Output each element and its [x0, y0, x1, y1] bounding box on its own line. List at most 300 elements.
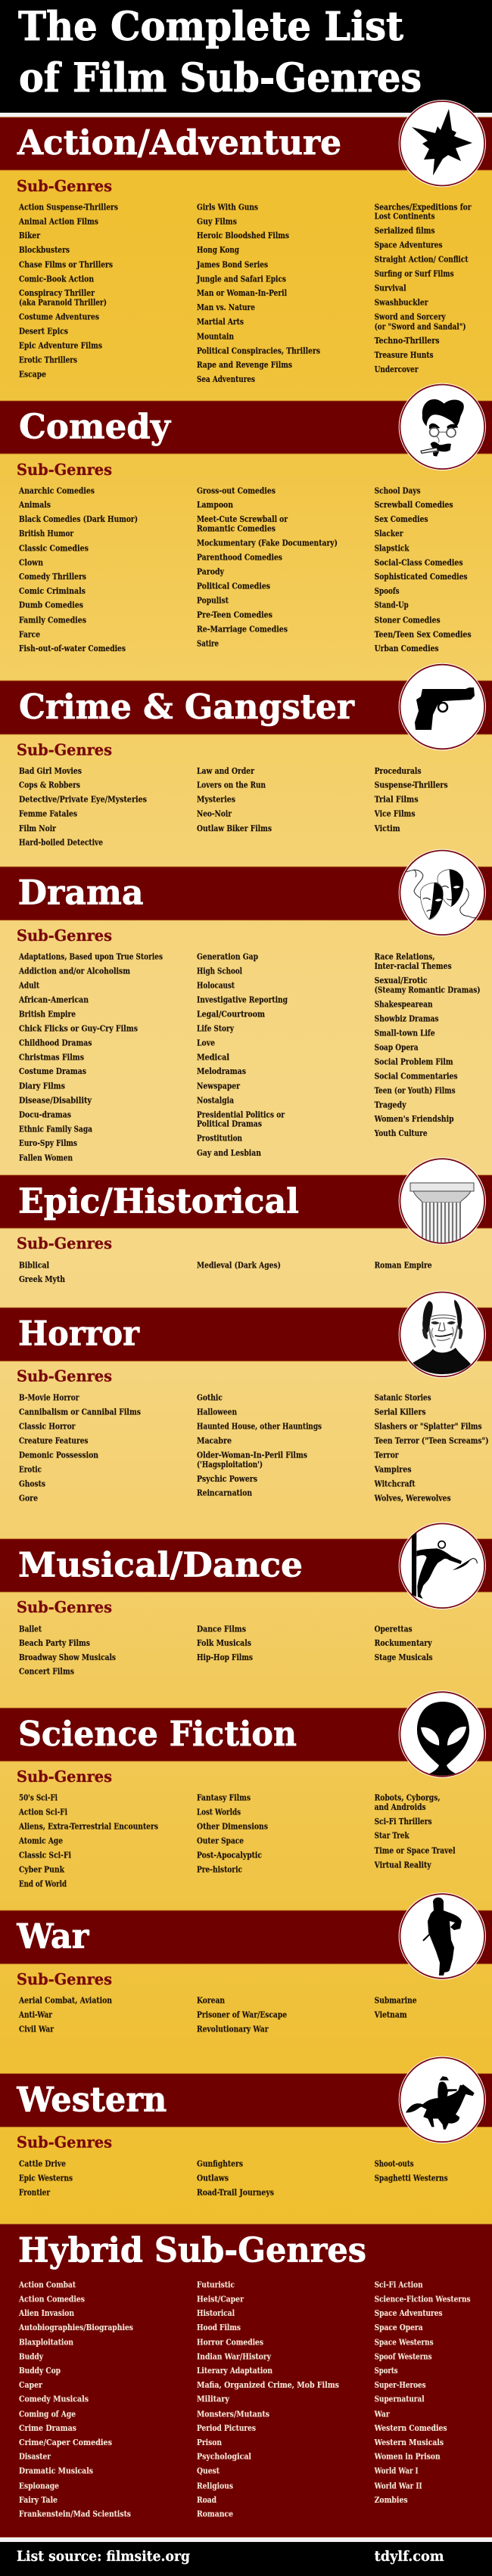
list column 3: Science-Fiction Westerns — [375, 2294, 471, 2304]
list column 1: B-Movie Horror — [19, 1393, 79, 1403]
list column 1: Espionage — [19, 2481, 59, 2491]
list column 1: Christmas Films — [19, 1052, 84, 1062]
list column 2: Post-Apocalyptic — [197, 1851, 262, 1861]
list column 3: Space Westerns — [375, 2337, 434, 2347]
list column 1: Action Sci-Fi — [18, 1808, 67, 1817]
list column 3: Race Relations, — [375, 952, 435, 962]
list column 3: Zombies — [375, 2495, 408, 2505]
list column 2: Legal/Courtroom — [197, 1010, 265, 1020]
list column 2: Nostalgia — [197, 1096, 234, 1106]
list column 2: Hong Kong — [197, 245, 239, 255]
list column 1: Dumb Comedies — [19, 601, 83, 610]
list column 2: Investigative Reporting — [197, 995, 288, 1004]
panel: hybrid sub-genres — [0, 2224, 492, 2537]
list column 3: Soap Opera — [375, 1042, 419, 1052]
list column 1: Biker — [19, 231, 40, 241]
list column 2 — [197, 1393, 322, 1498]
list column 3: Serial Killers — [375, 1407, 426, 1417]
list column 1: Disaster — [19, 2452, 51, 2462]
list column 2: Mafia, Organized Crime, Mob Films — [197, 2380, 339, 2390]
list column 1: Coming of Age — [19, 2409, 76, 2419]
list column 3: Serialized films — [375, 226, 435, 236]
list column 2: Mountain — [197, 331, 234, 341]
list column 1 — [19, 1393, 141, 1503]
list column 3: Time or Space Travel — [375, 1845, 456, 1855]
list column 3: Treasure Hunts — [375, 350, 434, 360]
list column 3: Wolves, Werewolves — [374, 1493, 451, 1503]
list column 3: Slacker — [375, 529, 403, 538]
list column 2: Prostitution — [197, 1134, 242, 1144]
panel: action/adventure — [0, 100, 492, 384]
list column 1: Dramatic Musicals — [19, 2466, 93, 2476]
list column 2: Political Conspiracies, Thrillers — [197, 346, 320, 355]
list column 1: Costume Adventures — [19, 312, 99, 321]
list column 3: Spoof Westerns — [375, 2351, 432, 2361]
list column 1: End of World — [19, 1879, 67, 1889]
list column 3: Space Adventures — [375, 2308, 443, 2318]
list column 1: Costume Dramas — [19, 1066, 86, 1076]
list column 2: Mysteries — [197, 795, 235, 805]
list column 1 — [19, 1624, 116, 1677]
list column 2: Re-Marriage Comedies — [197, 625, 288, 635]
list column 2: Satire — [197, 639, 219, 649]
list column 1: Chase Films or Thrillers — [19, 259, 113, 269]
icon: alien head — [399, 1690, 486, 1778]
list column 2: Psychic Powers — [197, 1474, 257, 1484]
list column 1: Crime/Caper Comedies — [19, 2438, 112, 2447]
list column 1: Alien Invasion — [18, 2308, 74, 2318]
list column 1: Animal Action Films — [18, 216, 98, 226]
list column 1: Comedy Musicals — [19, 2394, 89, 2404]
list column 3 — [375, 486, 472, 653]
list column 3 — [375, 2159, 448, 2183]
list column 1: (aka Paranoid Thriller) — [19, 297, 107, 307]
list column 3: Surfing or Surf Films — [375, 269, 454, 279]
list column 1: Crime Dramas — [19, 2423, 76, 2433]
list column 1: British Humor — [19, 529, 73, 538]
list column 1 — [18, 1793, 158, 1889]
list column 3: Urban Comedies — [375, 644, 439, 653]
list column 2: Love — [197, 1038, 215, 1047]
list column 1: Epic Adventure Films — [19, 341, 102, 351]
list column 3: World War II — [374, 2481, 422, 2491]
list column 3: Witchcraft — [374, 1479, 416, 1489]
list column 2: ('Hagsploitation') — [197, 1460, 263, 1470]
list column 1: Classic Comedies — [19, 543, 89, 553]
list column 1: Fairy Tale — [19, 2495, 58, 2505]
list column 2: Older-Woman-In-Peril Films — [197, 1451, 307, 1460]
list column 2: Sea Adventures — [197, 374, 255, 384]
list column 1: Fallen Women — [19, 1153, 73, 1163]
list column 1 — [18, 952, 163, 1163]
list column 2: Quest — [197, 2466, 220, 2476]
list column 1: Epic Westerns — [19, 2173, 73, 2183]
heading: War — [16, 1916, 90, 1957]
list column 1: Euro-Spy Films — [19, 1138, 77, 1148]
list column 2: Reincarnation — [197, 1488, 252, 1498]
list column 1: Frontier — [19, 2187, 50, 2197]
list column 2: Road — [197, 2495, 216, 2505]
list column 1: Comedy Thrillers — [19, 572, 86, 582]
list column 3: Stage Musicals — [375, 1653, 433, 1662]
heading: Horror — [18, 1314, 140, 1354]
band — [0, 401, 492, 454]
list column 3: Social Problem Film — [375, 1057, 453, 1066]
sub-heading: Sub-Genres — [17, 1768, 112, 1786]
list column 3: Searches/Expeditions for — [375, 202, 472, 212]
list column 1: Action Suspense-Thrillers — [18, 202, 118, 212]
list column 2: Lovers on the Run — [197, 781, 266, 790]
panel: comedy — [0, 383, 492, 653]
list column 3: Women in Prison — [374, 2452, 441, 2462]
list column 2: Military — [197, 2394, 230, 2404]
list column 2: Presidential Politics or — [197, 1110, 285, 1119]
list column 2: Haunted House, other Hauntings — [197, 1421, 322, 1431]
list column 3: Terror — [375, 1451, 399, 1460]
list column 3: Virtual Reality — [374, 1860, 431, 1870]
list column 2: Parenthood Comedies — [197, 553, 282, 563]
list column 3: Vice Films — [374, 809, 416, 819]
band — [0, 1539, 492, 1592]
list column 3: Satanic Stories — [375, 1393, 431, 1403]
source credit: List source: filmsite.org — [17, 2549, 190, 2565]
list column 3: Operettas — [375, 1624, 413, 1634]
list column 2: Revolutionary War — [197, 2024, 269, 2034]
list column 3: Space Adventures — [375, 240, 443, 250]
heading: Science Fiction — [18, 1714, 297, 1754]
list column 1: Femme Fatales — [19, 809, 77, 819]
list column 3: Western Comedies — [374, 2423, 447, 2433]
list column 2: Historical — [197, 2308, 235, 2318]
band — [0, 867, 492, 920]
list column 1: Ghosts — [19, 1479, 45, 1489]
panel: musical/dance — [0, 1522, 492, 1677]
list column 2 — [197, 2280, 339, 2519]
list column 2: Monsters/Mutants — [197, 2409, 269, 2419]
icon: soldier — [399, 1892, 486, 1980]
list column 3: Slapstick — [375, 543, 409, 553]
band — [0, 117, 492, 170]
list column 3: Vampires — [374, 1465, 412, 1475]
panel: epic/historical — [0, 1157, 492, 1284]
list column 1 — [19, 766, 147, 847]
list column 1: Family Comedies — [19, 615, 86, 625]
list column 2: Melodramas — [197, 1066, 246, 1076]
list column 3: Spaghetti Westerns — [375, 2173, 448, 2183]
list column 2: Prisoner of War/Escape — [197, 2010, 287, 2020]
list column 2 — [197, 1793, 268, 1875]
sub-heading: Sub-Genres — [17, 461, 112, 479]
list column 1: Ethnic Family Saga — [19, 1124, 92, 1134]
list column 1: Cattle Drive — [19, 2159, 66, 2168]
list column 2 — [197, 2159, 274, 2197]
panel: science fiction — [0, 1690, 492, 1889]
list column 1: Autobiographies/Biographies — [18, 2323, 133, 2332]
list column 2: Martial Arts — [197, 317, 244, 327]
list column 3: Shakespearean — [375, 1000, 433, 1010]
title header — [0, 0, 492, 117]
list column 1: Adult — [18, 980, 40, 990]
list column 1: Anti-War — [18, 2010, 52, 2020]
list column 2: Medieval (Dark Ages) — [197, 1260, 281, 1270]
list column 2: Medical — [197, 1052, 229, 1062]
list column 1: Classic Sci-Fi — [19, 1851, 71, 1861]
list column 2: High School — [197, 967, 242, 976]
icon: pistol — [399, 663, 486, 750]
list column 1: Frankenstein/Mad Scientists — [19, 2509, 131, 2519]
list column 2: Mockumentary (Fake Documentary) — [197, 538, 338, 548]
list column 2: Korean — [197, 1996, 225, 2006]
list column 2: Generation Gap — [197, 952, 258, 962]
list column 2: Jungle and Safari Epics — [196, 274, 286, 284]
list column 3: Western Musicals — [374, 2438, 444, 2447]
heading: Musical/Dance — [18, 1544, 303, 1584]
list column 1 — [18, 2280, 133, 2519]
list column 3: Shoot-outs — [375, 2159, 414, 2168]
list column 1: Diary Films — [19, 1082, 65, 1091]
list column 2: Road-Trail Journeys — [197, 2187, 274, 2197]
list column 1: Erotic Thrillers — [19, 355, 77, 365]
list column 2: Lost Worlds — [197, 1808, 241, 1817]
list column 2: Period Pictures — [197, 2423, 256, 2433]
list column 3: Sci-Fi Action — [375, 2280, 423, 2289]
list column 2: Newspaper — [197, 1082, 240, 1091]
list column 2 — [197, 952, 288, 1158]
list column 2: Macabre — [197, 1435, 232, 1445]
list column 1: African-American — [18, 995, 89, 1004]
list column 2: Law and Order — [197, 766, 254, 776]
list column 1: Comic-Book Action — [19, 274, 94, 284]
list column 1 — [18, 486, 138, 653]
list column 1: Ballet — [19, 1624, 42, 1634]
list column 1 — [19, 1260, 65, 1284]
list column 1 — [18, 202, 118, 379]
list column 2 — [197, 766, 272, 833]
list column 1: Aerial Combat, Aviation — [18, 1996, 112, 2006]
list column 2: Pre-Teen Comedies — [197, 610, 272, 620]
list column 1: Concert Films — [19, 1667, 74, 1677]
list column 1: Childhood Dramas — [19, 1038, 92, 1047]
list column 3 — [374, 952, 481, 1138]
band — [0, 2074, 492, 2127]
list column 3: Trial Films — [375, 795, 419, 805]
list column 1: Fish-out-of-water Comedies — [19, 644, 126, 653]
list column 3: Submarine — [375, 1996, 417, 2006]
list column 2: Parody — [197, 567, 225, 577]
list column 3: Tragedy — [375, 1100, 406, 1110]
heading: Epic/Historical — [18, 1181, 299, 1221]
list column 1: Farce — [19, 629, 40, 639]
maroon background — [0, 2224, 492, 2537]
list column 2: Psychological — [197, 2452, 251, 2462]
list column 1: Beach Party Films — [19, 1638, 90, 1648]
list column 2 — [197, 486, 338, 649]
list column 1: Hard-boiled Detective — [19, 838, 103, 847]
list column 3 — [375, 1624, 433, 1662]
list column 3: Undercover — [375, 365, 419, 374]
list column 1: Action Combat — [18, 2280, 76, 2289]
icon: theatre masks — [399, 849, 486, 936]
list column 2: Holocaust — [197, 980, 235, 990]
list column 3 — [375, 202, 472, 374]
list column 3: Sophisticated Comedies — [375, 572, 468, 582]
icon: dancer on lamp post — [399, 1522, 486, 1609]
heading: Drama — [18, 873, 144, 913]
list column 2: Populist — [197, 596, 229, 606]
panel: western — [0, 2056, 492, 2197]
list column 3 — [374, 766, 448, 833]
list column 2: Meet-Cute Screwball or — [197, 514, 288, 524]
list column 3: Lost Continents — [375, 212, 435, 222]
band — [0, 681, 492, 734]
list column 3: Stoner Comedies — [375, 615, 441, 625]
list column 2: Hood Films — [197, 2323, 241, 2332]
list column 3: Social Commentaries — [375, 1072, 458, 1082]
list column 3: Women's Friendship — [374, 1114, 454, 1124]
list column 3: Suspense-Thrillers — [375, 781, 448, 790]
list column 3: Small-town Life — [375, 1028, 435, 1038]
list column 1: Classic Horror — [19, 1421, 76, 1431]
list column 3: Super-Heroes — [375, 2380, 426, 2390]
icon: frankenstein — [399, 1291, 486, 1378]
list column 1 — [18, 1996, 112, 2034]
sub-heading: Sub-Genres — [17, 1970, 112, 1988]
list column 1: Atomic Age — [18, 1836, 63, 1845]
list column 3: Showbiz Dramas — [375, 1014, 439, 1024]
band — [0, 1708, 492, 1761]
list column 1: Animals — [18, 500, 51, 510]
list column 2: Outlaws — [197, 2173, 229, 2183]
list column 1: Chick Flicks or Guy-Cry Films — [19, 1024, 138, 1034]
band — [0, 1175, 492, 1228]
list column 1: Disease/Disability — [19, 1096, 92, 1106]
heading: Action/Adventure — [17, 123, 341, 163]
heading: Crime & Gangster — [19, 687, 355, 727]
list column 2: Indian War/History — [197, 2351, 271, 2361]
list column 2: Rape and Revenge Films — [197, 360, 292, 370]
list column 1: Anarchic Comedies — [18, 486, 95, 496]
heading: Comedy — [19, 406, 172, 446]
list column 3: Teen (or Youth) Films — [375, 1085, 456, 1095]
sub-heading: Sub-Genres — [17, 926, 112, 945]
title line 2: of Film Sub-Genres — [19, 55, 422, 101]
sub-heading: Sub-Genres — [17, 1367, 112, 1386]
list column 3: Techno-Thrillers — [375, 336, 440, 346]
list column 3: Sex Comedies — [375, 514, 428, 524]
list column 1: Docu-dramas — [19, 1110, 71, 1119]
list column 2 — [196, 202, 320, 384]
list column 1 — [19, 2159, 73, 2197]
list column 3: Screwball Comedies — [375, 500, 453, 510]
list column 2: Man or Woman-In-Peril — [197, 288, 287, 298]
list column 1: Caper — [19, 2380, 42, 2390]
list column 1: Film Noir — [19, 824, 56, 833]
sub-heading: Sub-Genres — [17, 177, 112, 195]
list column 2: Outlaw Biker Films — [197, 824, 272, 833]
list column 2: Gay and Lesbian — [197, 1148, 261, 1158]
list column 3: Inter-racial Themes — [375, 961, 452, 971]
list column 3: Spoofs — [375, 586, 400, 596]
list column 2: Lampoon — [197, 500, 233, 510]
list column 2: Romantic Comedies — [197, 523, 276, 533]
list column 1: 50's Sci-Fi — [19, 1793, 58, 1803]
list column 3: (or "Sword and Sandal") — [375, 321, 466, 331]
list column 3: Survival — [375, 284, 406, 293]
list column 1: Detective/Private Eye/Mysteries — [19, 795, 147, 805]
list column 1: Gore — [19, 1493, 38, 1503]
list column 3: War — [374, 2409, 390, 2419]
list column 3: Teen/Teen Sex Comedies — [375, 629, 472, 639]
icon: explosion — [399, 100, 486, 187]
list column 1: Creature Features — [19, 1435, 88, 1445]
list column 1: Buddy Cop — [19, 2366, 61, 2376]
list column 2: Political Dramas — [197, 1119, 262, 1129]
list column 3: Victim — [374, 824, 400, 833]
list column 3: Social-Class Comedies — [375, 557, 463, 567]
list column 2: Man vs. Nature — [197, 303, 255, 312]
list column 1: Addiction and/or Alcoholism — [18, 967, 130, 976]
list column 3: Sports — [375, 2366, 398, 2376]
list column 1: Bad Girl Movies — [19, 766, 82, 776]
list column 2: Gunfighters — [197, 2159, 243, 2168]
list column 2: Guy Films — [197, 216, 237, 226]
list column 3: Star Trek — [375, 1831, 409, 1841]
list column 1: Demonic Possession — [19, 1451, 98, 1460]
icon: greek column — [399, 1157, 486, 1245]
list column 2: Heist/Caper — [197, 2294, 244, 2304]
sub-heading: Sub-Genres — [17, 1234, 112, 1252]
list column 3: Straight Action/ Conflict — [375, 255, 469, 265]
list column 2: Gothic — [197, 1393, 223, 1403]
list column 3 — [374, 2280, 471, 2505]
list column 2: James Bond Series — [196, 259, 268, 269]
list column 1: Buddy — [19, 2351, 43, 2361]
list column 2: Folk Musicals — [197, 1638, 251, 1648]
icon: horse and rider — [399, 2056, 486, 2143]
panel: horror — [0, 1291, 492, 1503]
sub-heading: Sub-Genres — [17, 741, 112, 759]
sub-heading: Sub-Genres — [17, 1598, 112, 1616]
list column 3 — [374, 1393, 489, 1503]
list column 2: Futuristic — [197, 2280, 235, 2289]
list column 2: Dance Films — [197, 1624, 246, 1634]
list column 1: Biblical — [19, 1260, 49, 1270]
footer — [0, 2537, 492, 2576]
list column 3: Sexual/Erotic — [375, 976, 428, 985]
list column 1: Blaxploitation — [19, 2337, 73, 2347]
list column 1: Conspiracy Thriller — [19, 288, 95, 298]
heading: Hybrid Sub-Genres — [18, 2230, 366, 2270]
list column 3: Youth Culture — [374, 1128, 428, 1138]
list column 1: Cops & Robbers — [19, 781, 80, 790]
list column 2: Romance — [197, 2509, 233, 2519]
list column 1: Greek Myth — [19, 1274, 65, 1284]
site name: tdylf.com — [375, 2549, 444, 2565]
list column 2: Outer Space — [197, 1836, 244, 1845]
list column 1: British Empire — [19, 1010, 76, 1020]
list column 2: Political Comedies — [197, 581, 270, 591]
list column 2: Religious — [197, 2481, 233, 2491]
list column 1: Adaptations, Based upon True Stories — [18, 952, 163, 962]
list column 1: Escape — [19, 369, 46, 379]
list column 1: Blockbusters — [19, 245, 70, 255]
list column 2: Literary Adaptation — [197, 2366, 272, 2376]
list column 2: Pre-historic — [197, 1865, 242, 1875]
title line 1: The Complete List — [18, 4, 403, 50]
list column 1: Cyber Punk — [19, 1865, 64, 1875]
list column 3: Supernatural — [375, 2394, 425, 2404]
list column 1: Cannibalism or Cannibal Films — [19, 1407, 141, 1417]
